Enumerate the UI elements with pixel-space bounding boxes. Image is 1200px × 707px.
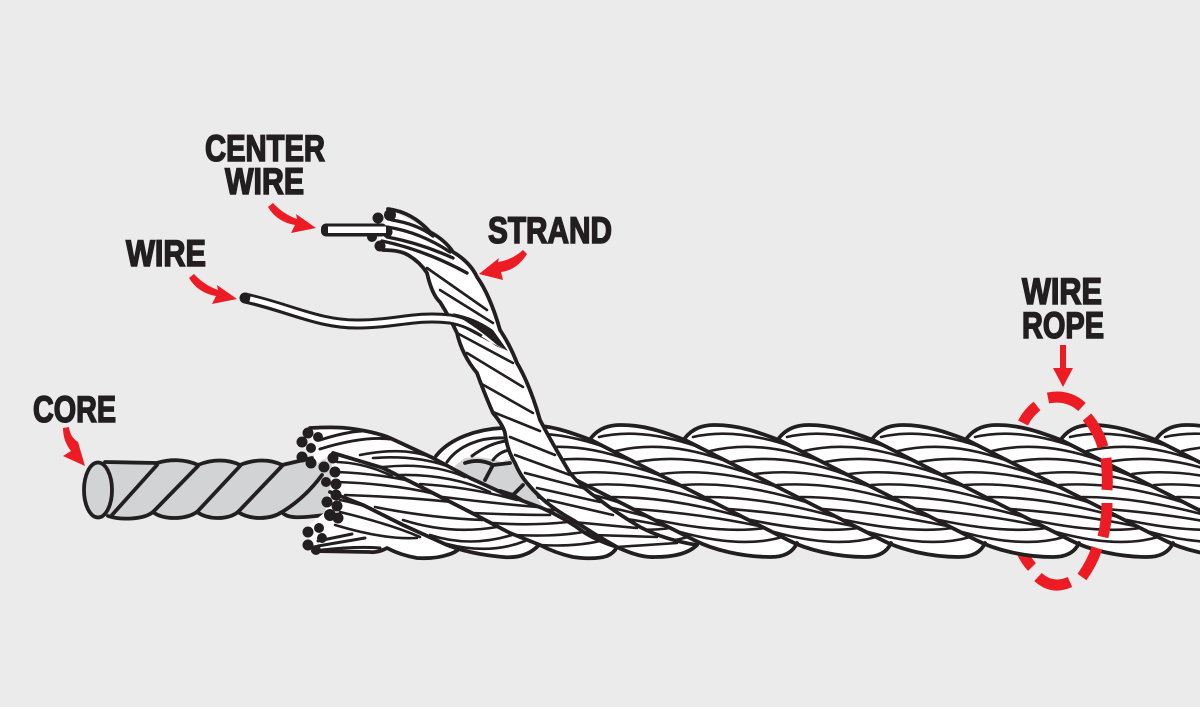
arrow: core — [63, 427, 85, 466]
label: wire rope: ROPE — [1022, 305, 1104, 346]
arrow: wire rope — [1053, 345, 1073, 387]
loose wire — [240, 292, 508, 351]
label: core: CORE — [33, 389, 116, 430]
main wire rope — [536, 423, 1200, 559]
wire rope dashed ellipse: front dashes — [1038, 397, 1107, 585]
label: wire rope — [1022, 271, 1104, 346]
label: center wire: WIRE — [225, 161, 304, 202]
label: wire rope: WIRE — [1022, 271, 1102, 312]
core — [84, 455, 345, 519]
lifted strand — [367, 209, 697, 557]
label: center wire: CENTER — [205, 128, 325, 169]
arrow: strand — [479, 250, 527, 280]
arrow: center wire — [268, 203, 316, 233]
back strand arcs with exposed core — [432, 428, 545, 510]
lower back strand — [302, 492, 462, 558]
label: center wire — [205, 128, 325, 202]
center wire — [321, 224, 387, 236]
label: wire: WIRE — [126, 233, 206, 274]
arrow: wire — [189, 274, 237, 304]
front middle strand — [318, 452, 617, 558]
wire rope diagram — [34, 134, 1200, 591]
label: strand: STRAND — [488, 210, 612, 251]
upper front strand — [296, 427, 617, 557]
wire rope dashed ellipse: back dashes — [1022, 406, 1037, 567]
